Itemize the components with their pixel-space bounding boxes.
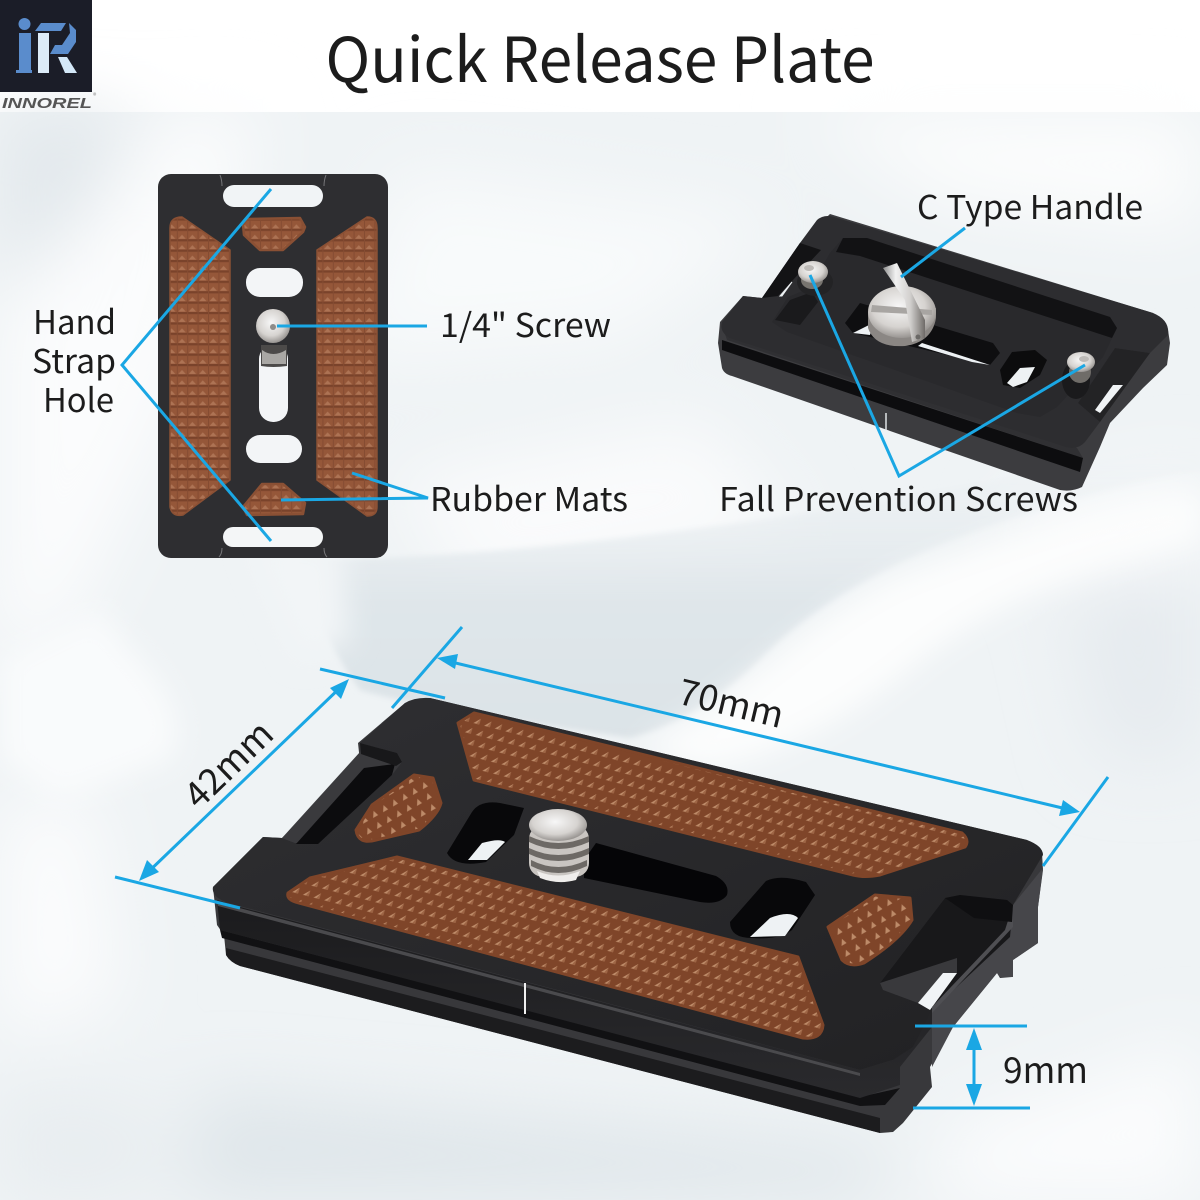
callouts: hand strap hole — [32, 189, 271, 541]
top face — [213, 698, 1043, 1070]
label: hand strap hole: Hand — [33, 296, 116, 344]
right side wall — [932, 868, 1043, 1067]
top plate — [721, 216, 1168, 448]
dark channel — [722, 340, 1083, 472]
dimension: 42mm: 42mm — [170, 707, 283, 819]
dimension: 70mm: 70mm — [674, 663, 790, 739]
strap notch: right — [880, 895, 1013, 1010]
upper slab side — [722, 325, 1083, 458]
rubber mat: small right — [828, 895, 912, 965]
rubber mat: upper long — [458, 713, 967, 876]
callout: C type handle: C Type Handle — [917, 181, 1143, 229]
slot — [845, 303, 1000, 365]
C type handle knob — [868, 263, 936, 346]
dimension: 70mm — [320, 627, 1108, 866]
silhouette and lower slab — [213, 698, 1043, 1133]
callout: C type handle — [901, 181, 1143, 277]
label: hand strap hole: Strap — [32, 335, 116, 383]
threaded hole — [1000, 350, 1047, 388]
hole: left threaded — [447, 802, 524, 864]
rubber mat: lower long — [288, 857, 823, 1038]
rubber mat: bottom small — [243, 484, 305, 515]
logo: INNOREL: INNOREL — [2, 96, 92, 112]
strap notch: left — [762, 243, 821, 298]
logo: INNOREL — [0, 0, 97, 112]
rubber mat: small left — [356, 775, 441, 841]
callout: rubber mats: Rubber Mats — [430, 473, 628, 521]
strap notch: left — [282, 752, 396, 843]
rubber mat: right — [317, 217, 377, 516]
centre mark — [524, 983, 526, 1014]
fall prevention screw: left — [797, 261, 833, 296]
label: hand strap hole — [32, 296, 116, 422]
strap notch: right — [1078, 348, 1150, 422]
callout: fall prevention screws — [719, 275, 1085, 521]
plate: top view with rubber mats — [158, 174, 388, 558]
logo: INNOREL: ® — [93, 91, 97, 101]
front side of upper slab — [217, 900, 932, 1098]
dimension: 42mm — [115, 679, 349, 908]
screw — [256, 309, 290, 367]
gap between slabs — [220, 930, 900, 1106]
hole: lower — [246, 435, 302, 463]
label: hand strap hole: Hole — [43, 374, 114, 422]
1/4 inch screw — [529, 809, 589, 882]
hole: upper — [246, 268, 303, 297]
dimension: 9mm: 9mm — [1003, 1042, 1088, 1094]
grey swoosh behind the large plate — [300, 440, 1200, 738]
rubber mat: top small — [243, 218, 305, 250]
callout: fall prevention screws: Fall Prevention Screws — [719, 473, 1078, 521]
callout: 1/4 inch screw: 1/4" Screw — [440, 299, 611, 347]
recess — [772, 238, 1117, 417]
centre mark — [885, 413, 887, 430]
dimension: 9mm — [913, 1026, 1088, 1108]
strap slot: top — [223, 185, 323, 207]
plate: angled view with C type handle — [718, 214, 1170, 491]
title: Quick Release Plate — [326, 10, 874, 100]
fall prevention screw: right — [1062, 352, 1095, 399]
silhouette and lower slab — [718, 214, 1170, 491]
hole: right threaded — [730, 878, 815, 938]
strap slot: bottom — [223, 527, 323, 547]
hole: long slot — [584, 843, 728, 903]
rubber mat: left — [170, 217, 230, 515]
plate: large angled view with dimensions — [213, 698, 1043, 1133]
hole: long slot — [259, 345, 288, 422]
lower slab shade — [226, 948, 880, 1133]
callout: rubber mats — [281, 473, 628, 521]
